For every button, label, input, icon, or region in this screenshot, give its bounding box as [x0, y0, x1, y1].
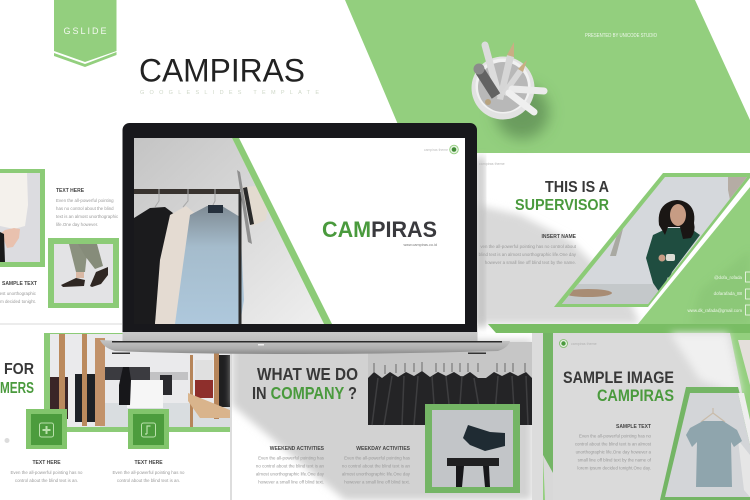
laptop	[100, 123, 510, 354]
text: insert name: blind text is an almost unorthographic life.One day	[479, 252, 577, 257]
text: sample text: small line off blind text by the name of	[578, 458, 652, 462]
text: sample text: lorem ipsum decided tonight.One day.	[577, 466, 651, 470]
text: social handles: www.dk_rafada@gmail.com	[688, 308, 742, 313]
text: weekend activities: WEEKEND ACTIVITIES	[270, 446, 325, 452]
photo frame: t-shirt	[660, 387, 750, 500]
photo: black clothes rack	[368, 342, 532, 425]
text: column two	[112, 460, 185, 483]
icon: music box	[128, 409, 169, 449]
text: weekend activities: Even the all-powerful pointing has	[258, 456, 325, 460]
logo: campiras theme	[571, 342, 597, 346]
text: sample text: est unorthographic	[0, 291, 37, 296]
text: weekend activities	[256, 446, 325, 484]
panel: green social block	[638, 187, 750, 324]
photo frame: supervisor	[554, 173, 750, 307]
text: text here: text is an almost unorthographic	[56, 214, 119, 219]
heading	[252, 364, 358, 403]
heading: IN COMPANY ?	[252, 383, 357, 403]
text: text here: has no control about the blind	[56, 206, 114, 211]
decorative dot marker	[4, 438, 10, 443]
icon: pencil cup	[472, 42, 549, 139]
heading: for customers	[0, 361, 34, 397]
panel: left slide	[0, 160, 122, 324]
laptop lid silver	[122, 325, 478, 341]
text: column two: Even the all-powerful pointing has no	[112, 470, 185, 475]
screen logo	[424, 145, 458, 154]
heading: SUPERVISOR	[515, 197, 609, 214]
text: column one: control about the blind text is an.	[15, 478, 78, 483]
text: text here: Even the all-powerful pointing	[56, 198, 114, 203]
icon: plus box	[26, 409, 67, 449]
text: weekday activities: Even the all-powerful pointing has	[344, 456, 411, 460]
text: social handles	[688, 275, 743, 313]
heading: WHAT WE DO	[257, 364, 358, 384]
text: sample text: control about the blind text is an almost	[575, 442, 652, 446]
panel: green divider band	[488, 324, 750, 333]
heading: CAMPIRAS	[597, 387, 674, 405]
text: weekday activities: no control about the blind text is an	[342, 464, 411, 468]
text: insert name	[479, 234, 577, 265]
text: column one: TEXT HERE	[32, 460, 61, 466]
text: sample text	[575, 424, 652, 470]
heading	[563, 369, 674, 405]
banner: GSLIDE	[54, 0, 116, 67]
panel: green cover shape	[345, 0, 750, 153]
laptop base	[100, 340, 510, 354]
text: social handles: dofarafada_88	[714, 291, 743, 296]
text: weekend activities: almost unorthographic life.One day	[256, 472, 325, 476]
text: insert name: ven the all-powerful pointing has no control about	[480, 244, 577, 249]
logo	[560, 340, 597, 348]
panel: supervisor slide	[477, 157, 750, 327]
heading: for customers: MERS	[0, 380, 34, 397]
panel: sample image slide	[532, 333, 750, 500]
banner: GSLIDE: GSLIDE	[64, 26, 106, 36]
title: CAMPIRAS	[139, 52, 305, 88]
heading: SAMPLE IMAGE	[563, 369, 674, 387]
text: weekday activities: however a small line off blind text.	[344, 480, 410, 484]
text: weekday activities: WEEKDAY ACTIVITIES	[356, 446, 411, 452]
text: insert name: however a small line off blind text by the name.	[485, 260, 576, 265]
text: text here	[56, 188, 119, 227]
text: sample text: Even the all-powerful pointing has no	[579, 434, 652, 438]
panel: store slide	[0, 330, 232, 500]
text: weekday activities: almost unorthographic life.One day	[342, 472, 411, 476]
text: insert name: INSERT NAME	[542, 234, 577, 240]
text: text here: life.One day however.	[56, 222, 98, 227]
title: GOOGLESLIDES TEMPLATE	[140, 90, 319, 96]
green diagonal stripe	[232, 138, 332, 324]
text: weekend activities: no control about the blind text is an	[256, 464, 325, 468]
heading	[515, 179, 609, 214]
text: column one: Even the all-powerful pointing has no	[10, 470, 83, 475]
photo frame: sandals	[48, 238, 119, 308]
heading: for customers: FOR	[4, 361, 34, 378]
panel: what we do slide	[232, 335, 532, 500]
text: sample text: unorthographic life.One day however a	[576, 450, 652, 454]
photo frame: shirt	[0, 169, 45, 267]
text: text here: TEXT HERE	[56, 188, 85, 194]
small label: campiras theme	[479, 162, 505, 166]
text: social handles: @dofa_rofada	[714, 275, 743, 280]
text: sample text: SAMPLE TEXT	[616, 424, 651, 430]
screen title: www.campiras.co.id	[403, 243, 437, 247]
photo frame: store	[44, 333, 230, 432]
text: column two: control about the blind text is an.	[117, 478, 180, 483]
text: weekend activities: however a small line off blind text.	[258, 480, 324, 484]
text: sample text: SAMPLE TEXT	[2, 281, 37, 287]
credit text: PRESENTED BY UNICODE STUDIO	[585, 33, 657, 39]
icons: social boxes	[746, 272, 750, 315]
photo: clothes rack	[134, 138, 334, 324]
text: column two: TEXT HERE	[134, 460, 163, 466]
screen logo: campiras theme	[424, 148, 448, 152]
text: weekday activities	[342, 446, 411, 484]
laptop bezel	[122, 123, 477, 332]
text: sample text	[0, 281, 37, 304]
screen	[134, 138, 465, 324]
photo frame: shoes on stool	[425, 404, 520, 493]
screen title: CAMPIRAS	[322, 217, 437, 242]
text: column one	[10, 460, 83, 483]
heading: THIS IS A	[545, 179, 609, 196]
